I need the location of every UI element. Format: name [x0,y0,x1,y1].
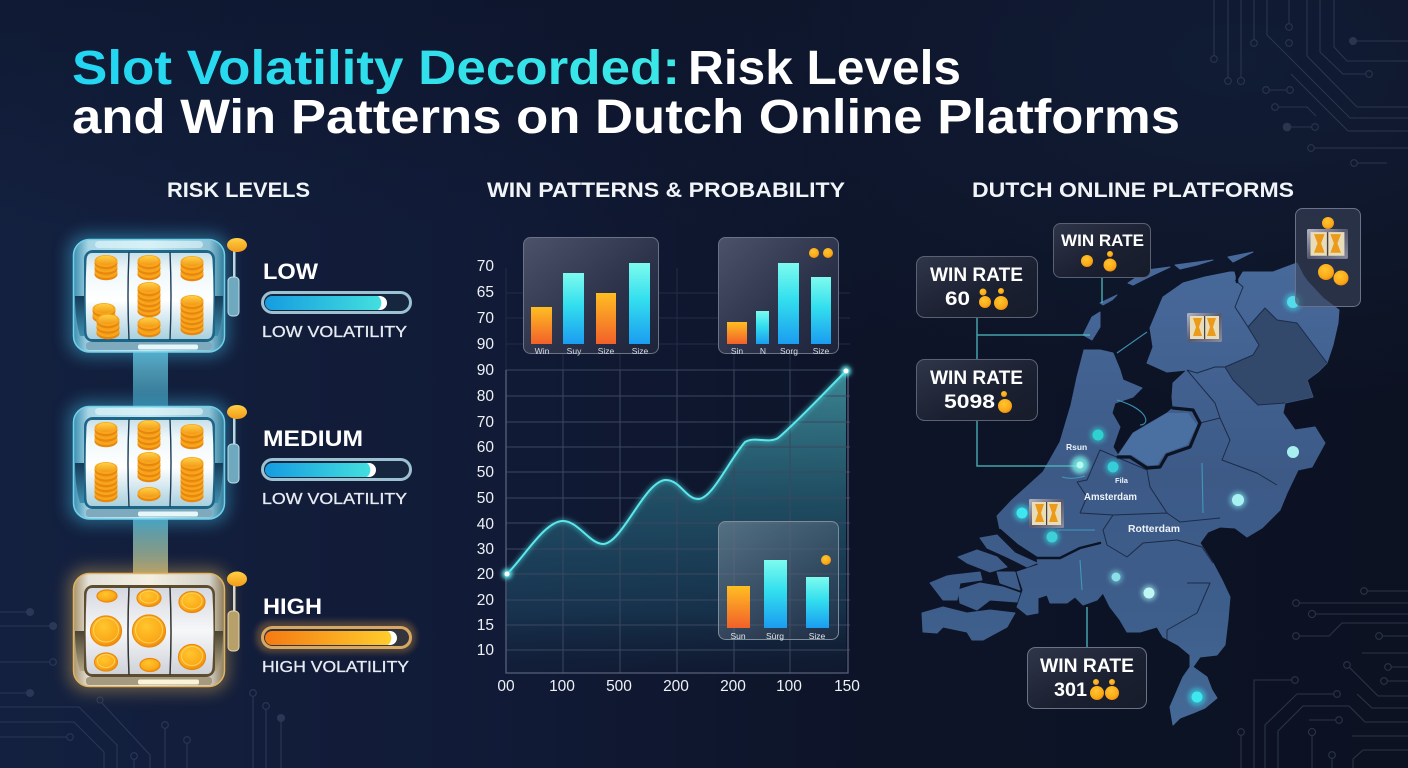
x axis labels: 200 [663,678,689,695]
caption: low volatility: LOW VOLATILITY [262,324,407,341]
callout: slot machine tile [1296,208,1360,306]
x axis labels: 200 [720,678,746,695]
mini chart: top right [718,238,838,356]
flevoland [1118,413,1197,465]
meter: high [256,621,416,653]
connector: low to medium [133,352,168,406]
y axis labels: 20 [477,592,494,609]
caption: medium volatility: LOW VOLATILITY [262,491,407,508]
y axis labels: 10 [477,642,494,659]
panel: netherlands map [916,208,1360,725]
y axis labels: 50 [477,490,494,507]
title: Risk Levels [688,42,961,95]
connector lines [977,278,1102,647]
circuit traces: top right [1211,0,1408,166]
callout: win rate top: WIN RATE [1061,231,1144,250]
callout: win rate 60: WIN RATE [930,265,1023,286]
glowing city dots [1014,293,1302,706]
city labels: Amsterdam [1084,491,1137,503]
label: high: HIGH [263,594,322,619]
mini chart: top left: Size [598,346,615,356]
rivers [1000,272,1237,558]
map slot icon: north [1187,313,1222,342]
callout: win rate 60: 60 [945,289,970,310]
mini chart: bottom: Sùrg [766,631,784,641]
callout: win rate 5098: 5098 [944,392,995,413]
meter: medium [262,460,410,480]
panel: risk levels [68,234,416,692]
panel: win patterns chart [477,238,860,695]
x axis labels: 100 [776,678,802,695]
slot machine: high [68,568,247,692]
y axis labels: 90 [477,336,494,353]
mini chart: top right: Size [813,346,830,356]
y axis labels: 80 [477,388,494,405]
x axis labels: 500 [606,678,632,695]
mini chart: top left: Win [535,346,550,356]
mini chart: bottom: Size [809,631,826,641]
y axis labels: 70 [477,414,494,431]
y axis labels: 60 [477,439,494,456]
circuit traces: bottom right [1238,588,1408,768]
x axis labels: 100 [549,678,575,695]
mini chart: top right: Sorg [780,346,798,356]
mini chart: bottom [718,522,838,641]
slot machine: medium [68,401,247,524]
title: Slot Volatility Decorded: [72,42,680,95]
x axis labels: 150 [834,678,860,695]
y axis labels: 20 [477,566,494,583]
x axis labels: 00 [497,678,515,695]
callout: win rate 301: WIN RATE [1040,656,1134,677]
connector: medium to high [133,519,168,573]
cyan waterways [1057,332,1203,590]
meter: low [262,292,410,312]
mini chart: top right: Sin [731,346,743,356]
callout: win rate top [1054,224,1150,278]
y axis labels: 90 [477,362,494,379]
city labels: Fila [1115,476,1129,485]
callout: win rate 301 [1028,648,1146,708]
callout: win rate 5098: WIN RATE [930,368,1023,389]
chart grid [506,268,850,673]
circuit traces: bottom left [0,608,284,768]
y axis labels: 15 [477,617,494,634]
heading: dutch platforms: DUTCH ONLINE PLATFORMS [972,179,1294,202]
y axis labels: 40 [477,516,494,533]
mini chart: bottom: Sun [730,631,746,641]
label: low: LOW [263,259,318,284]
mini chart: top left: Size [632,346,649,356]
callout: win rate 5098 [916,360,1038,420]
y axis labels: 50 [477,464,494,481]
map landmass [922,252,1339,725]
y axis labels: 30 [477,541,494,558]
y axis labels: 70 [477,310,494,327]
callout: win rate 60 [916,256,1038,318]
city labels: Rsun [1066,442,1087,452]
heading: risk levels: RISK LEVELS [167,179,310,202]
mini chart: top left [524,238,658,356]
y axis labels: 65 [477,284,494,301]
callout: win rate 301: 301 [1054,680,1087,701]
win line [502,366,851,579]
x axis labels [497,678,860,695]
y axis labels [477,258,494,659]
area under line [507,371,846,673]
map slot icon: west [1029,499,1064,528]
city labels: Rotterdam [1128,523,1180,535]
mini chart: top right: N [760,346,766,356]
mini chart: top left: Suy [567,346,582,356]
heading: win patterns: WIN PATTERNS & PROBABILITY [487,179,845,202]
city labels [1066,442,1180,535]
slot machine: low [68,234,247,357]
label: medium: MEDIUM [263,426,363,451]
title [72,42,1180,144]
y axis labels: 70 [477,258,494,275]
caption: high volatility: HIGH VOLATILITY [262,659,409,676]
darker province: drenthe [1225,308,1327,405]
title: and Win Patterns on Dutch Online Platforms [72,91,1180,144]
province borders [1077,280,1327,640]
